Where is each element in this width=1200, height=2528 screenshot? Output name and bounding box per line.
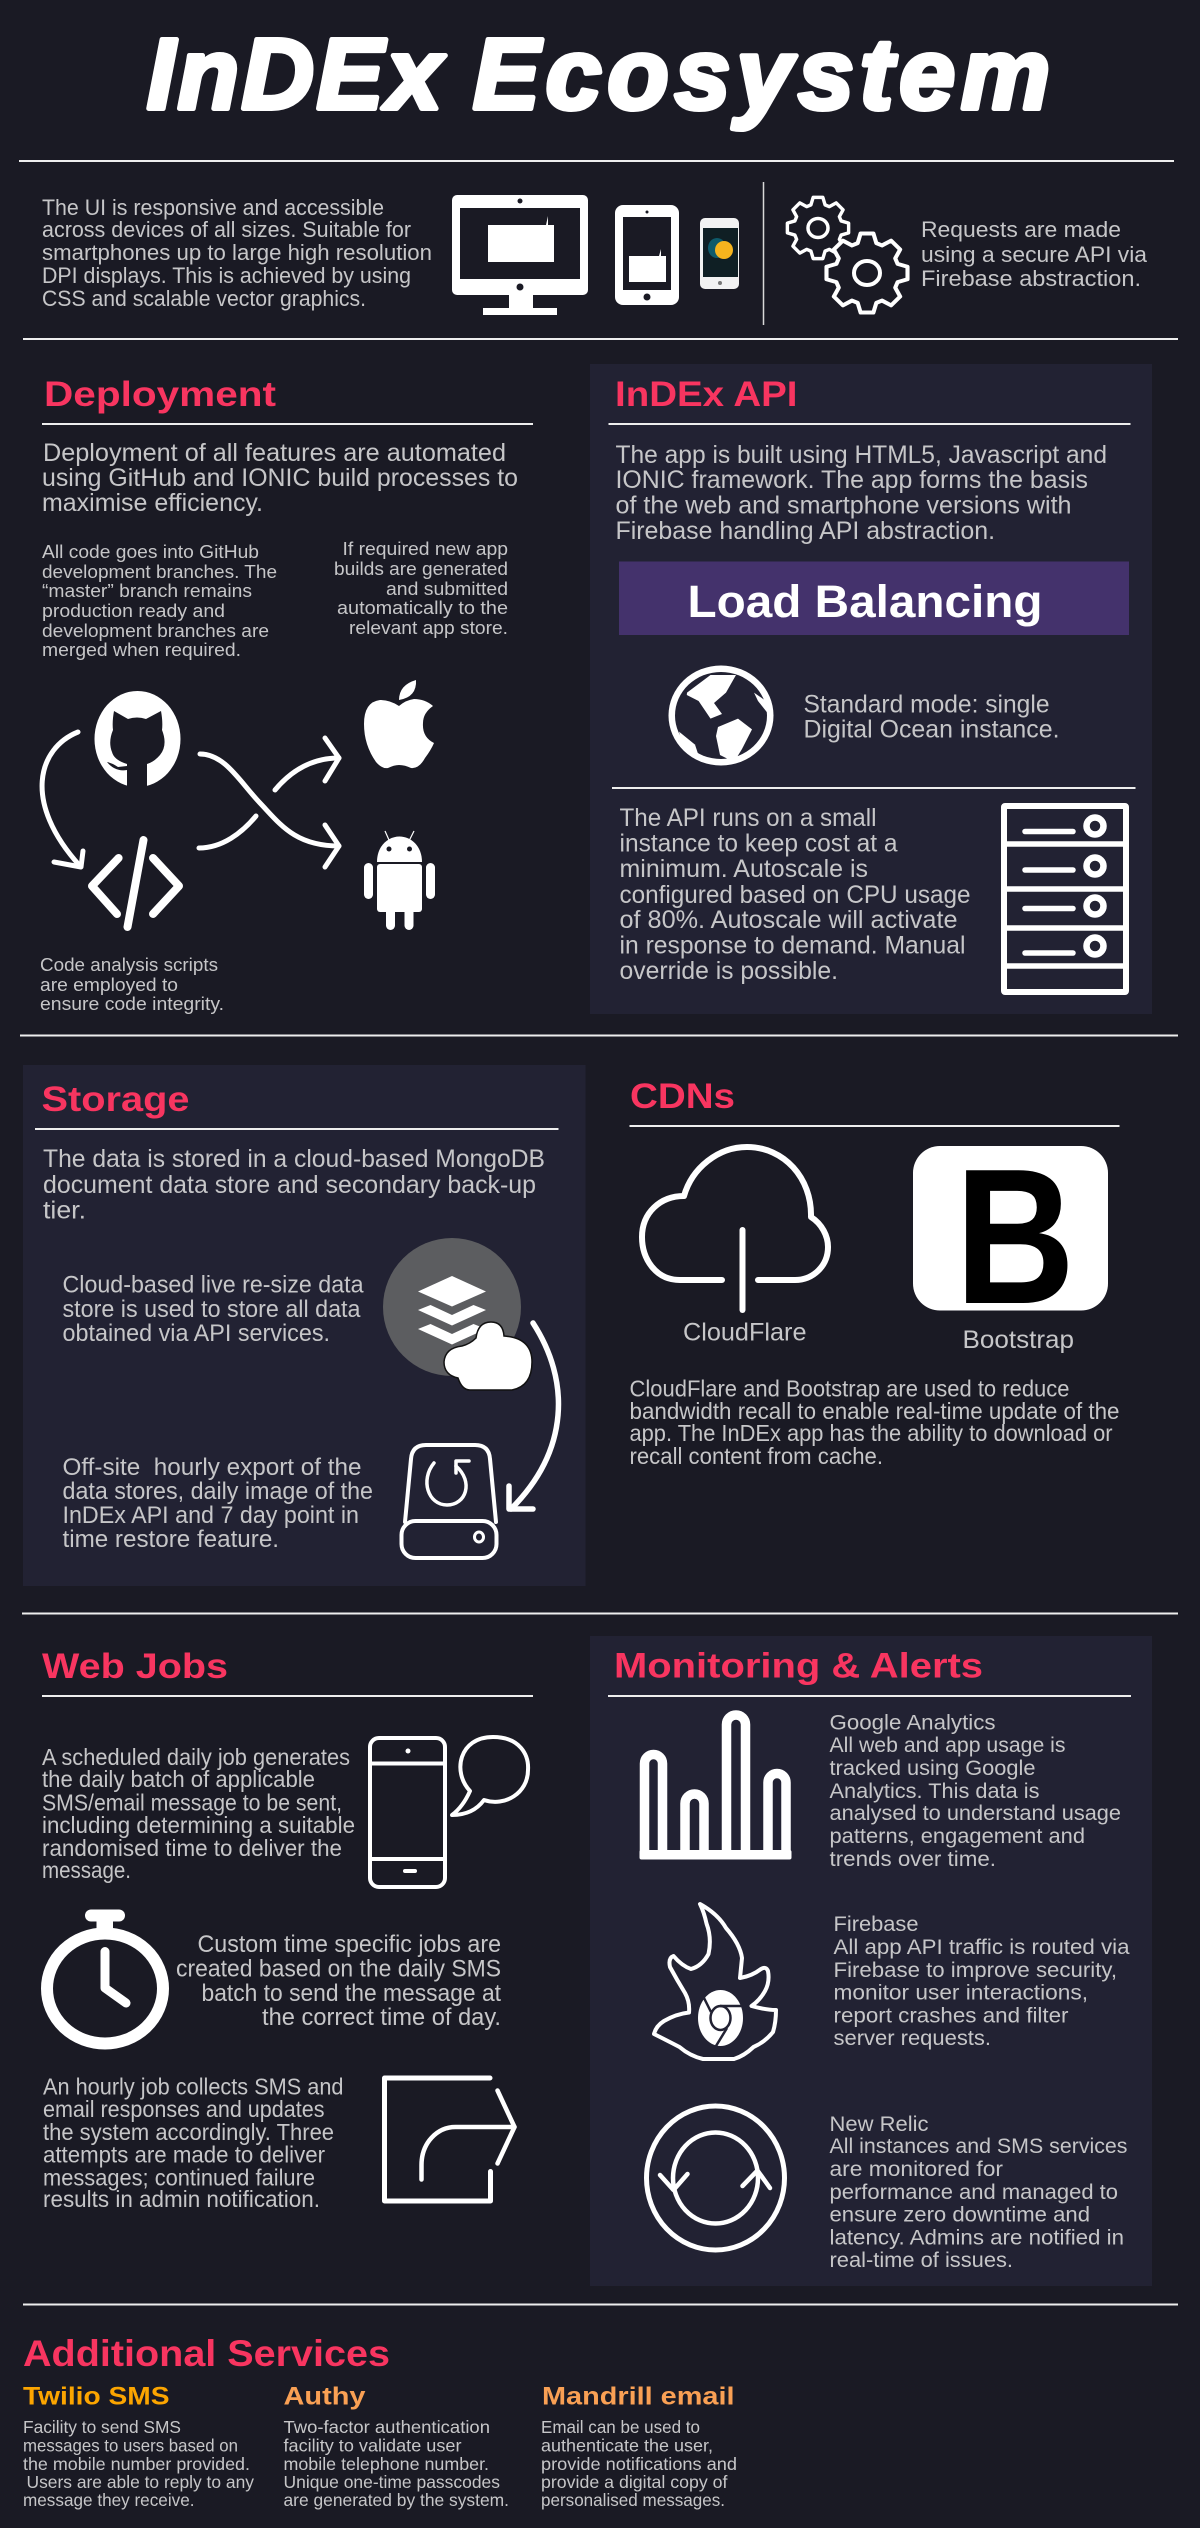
text: scheduled daily job xyxy=(42,1744,355,1883)
text: Firebase: Firebase to improve security, xyxy=(834,1958,1117,1982)
text: autoscale: in response to demand. Manual xyxy=(620,932,966,960)
text: API summary xyxy=(616,441,1107,545)
text: code analysis: are employed to xyxy=(40,975,178,995)
arrow: data store to backup xyxy=(509,1323,558,1509)
text: off-site backup: data stores, daily image of the xyxy=(62,1478,373,1505)
text: Google Analytics: All web and app usage is xyxy=(830,1733,1066,1757)
heading: Monitoring & Alerts: Monitoring & Alerts xyxy=(614,1646,983,1686)
text: custom time jobs: created based on the daily SMS xyxy=(176,1956,501,1982)
text: New Relic: real-time of issues. xyxy=(830,2248,1013,2272)
intro: responsive UI text: CSS and scalable vector graphics. xyxy=(42,286,366,311)
text: New Relic: are monitored for xyxy=(830,2157,1003,2181)
text: Google Analytics: Analytics. This data is xyxy=(830,1779,1040,1803)
text: New Relic xyxy=(830,2112,1128,2272)
text: app store builds xyxy=(334,539,508,638)
text: autoscale: configured based on CPU usage xyxy=(620,881,970,909)
icon: globe xyxy=(668,666,774,766)
title: InDEx xyxy=(147,18,445,130)
arrow: code to Apple xyxy=(199,738,339,848)
text: API summary: IONIC framework. The app forms the basis xyxy=(616,466,1088,494)
intro: responsive UI text: smartphones up to large high resolution xyxy=(42,240,432,265)
column: Authy: facility to validate user xyxy=(284,2436,462,2456)
text: autoscale: instance to keep cost at a xyxy=(620,830,898,858)
text: custom time jobs xyxy=(176,1931,501,2031)
icon: GitHub xyxy=(94,691,180,790)
intro: responsive UI text: The UI is responsive and accessible xyxy=(42,195,384,220)
text: off-site backup: InDEx API and 7 day point in xyxy=(62,1502,359,1529)
text: cloud-based data store: Cloud-based live re-size data xyxy=(62,1272,364,1298)
column: Twilio SMS: Users are able to reply to any xyxy=(26,2472,254,2492)
intro: responsive UI text: across devices of all sizes. Suitable for xyxy=(42,217,411,242)
intro: secure API text: using a secure API via xyxy=(921,242,1148,267)
text: Firebase: All app API traffic is routed via xyxy=(834,1935,1130,1959)
text: GitHub branches: All code goes into GitHub xyxy=(42,542,259,562)
text: Google Analytics: patterns, engagement and xyxy=(830,1824,1085,1848)
icon: New Relic cycle xyxy=(646,2106,784,2250)
text: Google Analytics: trends over time. xyxy=(830,1847,996,1871)
panel: Deployment xyxy=(40,375,533,1014)
text: GitHub branches: development branches. The xyxy=(42,562,277,582)
text: standard mode: Standard mode: single xyxy=(804,690,1050,718)
icon: CloudFlare cloud xyxy=(642,1147,828,1310)
text: custom time jobs: the correct time of day. xyxy=(262,2004,501,2031)
column: Authy: Unique one-time passcodes xyxy=(284,2472,500,2492)
banner: Load Balancing xyxy=(619,562,1129,635)
text: New Relic: latency. Admins are notified in xyxy=(830,2226,1124,2250)
text: deployment summary xyxy=(42,439,518,517)
text: GitHub branches: production ready and xyxy=(42,601,225,621)
column: Twilio SMS: message they receive. xyxy=(23,2490,194,2510)
icon: tablet xyxy=(615,205,679,305)
panel: Storage xyxy=(23,1065,586,1586)
icon: code brackets xyxy=(92,840,179,927)
text: custom time jobs: batch to send the message at xyxy=(202,1980,501,2007)
text: New Relic: New Relic xyxy=(830,2112,929,2136)
column: Mandrill email: Mandrill email xyxy=(542,2382,734,2410)
label: CloudFlare: CloudFlare xyxy=(683,1318,806,1346)
column: Twilio SMS: Facility to send SMS xyxy=(23,2417,181,2437)
text: New Relic: ensure zero downtime and xyxy=(830,2202,1090,2226)
text: scheduled daily job: SMS/email message to be sent, xyxy=(42,1790,342,1816)
title xyxy=(147,18,1050,130)
icon: stopwatch xyxy=(47,1910,163,2044)
column: Authy: Two-factor authentication xyxy=(284,2417,490,2437)
panel: CDNs xyxy=(630,1077,1120,1469)
text: Firebase xyxy=(834,1912,1130,2050)
icon: phone with speech bubble xyxy=(370,1737,528,1887)
text: scheduled daily job: including determining a suitable xyxy=(42,1812,355,1838)
text: deployment summary: maximise efficiency. xyxy=(42,489,263,517)
text: deployment summary: Deployment of all features are automated xyxy=(43,439,506,467)
text: CDN summary: app. The InDEx app has the ability to download or xyxy=(630,1420,1113,1446)
text: autoscale: The API runs on a small xyxy=(620,804,876,832)
panel: Additional Services xyxy=(23,2333,737,2510)
panel: InDEx API xyxy=(590,364,1152,1014)
text: Firebase: server requests. xyxy=(834,2026,991,2050)
panel: Web Jobs xyxy=(42,1647,533,2212)
label: Bootstrap: Bootstrap xyxy=(962,1326,1074,1354)
intro: secure API text xyxy=(921,217,1148,291)
text: off-site backup xyxy=(62,1454,373,1553)
column: Authy: are generated by the system. xyxy=(284,2490,509,2510)
icon: Bootstrap: B xyxy=(955,1128,1075,1344)
text: hourly job: attempts are made to deliver xyxy=(43,2142,325,2168)
text: app store builds: builds are generated xyxy=(334,559,508,579)
text: Firebase: Firebase xyxy=(834,1912,918,1936)
text: CDN summary: bandwidth recall to enable real-time update of the xyxy=(630,1398,1120,1424)
text: GitHub branches: merged when required. xyxy=(42,640,241,660)
arrow: GitHub to Android xyxy=(200,754,339,867)
text: API summary: The app is built using HTML5, Javascript and xyxy=(616,441,1107,469)
icon: share arrow box xyxy=(384,2078,514,2201)
text: scheduled daily job: randomised time to deliver the xyxy=(42,1835,342,1861)
column: Twilio SMS xyxy=(23,2382,254,2510)
column: Mandrill email xyxy=(541,2382,737,2510)
heading: Web Jobs: Web Jobs xyxy=(42,1647,228,1686)
icon: bar chart xyxy=(640,1715,792,1860)
column: Twilio SMS: messages to users based on xyxy=(23,2436,238,2456)
text: New Relic: All instances and SMS services xyxy=(830,2134,1128,2158)
intro: secure API text: Firebase abstraction. xyxy=(921,266,1141,291)
text: deployment summary: using GitHub and IONIC build processes to xyxy=(42,464,518,492)
text: GitHub branches: “master” branch remains xyxy=(42,581,252,601)
text: code analysis xyxy=(40,955,224,1014)
text: Firebase: report crashes and filter xyxy=(834,2004,1068,2028)
text: hourly job xyxy=(43,2074,344,2212)
text: standard mode xyxy=(804,690,1060,744)
icon: smartphone xyxy=(700,218,739,289)
heading: CDNs: CDNs xyxy=(630,1077,735,1116)
column: Mandrill email: provide a digital copy of xyxy=(541,2472,728,2492)
text: storage summary: tier. xyxy=(43,1196,86,1224)
panel: Monitoring & Alerts xyxy=(590,1636,1152,2286)
text: scheduled daily job: A scheduled daily job generates xyxy=(42,1744,350,1770)
text: cloud-based data store xyxy=(62,1272,364,1347)
intro: responsive UI text: DPI displays. This is achieved by using xyxy=(42,263,411,288)
column: Authy: Authy xyxy=(284,2382,366,2410)
icon: Apple xyxy=(364,680,434,768)
text: hourly job: results in admin notification. xyxy=(43,2186,320,2212)
column: Mandrill email: Email can be used to xyxy=(541,2417,700,2437)
text: autoscale: minimum. Autoscale is xyxy=(620,855,868,883)
banner: Load Balancing: Load Balancing xyxy=(688,576,1042,627)
text: code analysis: ensure code integrity. xyxy=(40,994,224,1014)
icon: layers with cloud xyxy=(383,1238,532,1390)
icon: Android xyxy=(364,831,435,930)
column: Authy: mobile telephone number. xyxy=(284,2454,489,2474)
text: app store builds: relevant app store. xyxy=(349,618,508,638)
text: GitHub branches: development branches are xyxy=(42,621,269,641)
text: GitHub branches xyxy=(42,542,277,660)
text: scheduled daily job: the daily batch of applicable xyxy=(42,1766,315,1792)
heading: Additional Services: Additional Services xyxy=(23,2333,390,2374)
column: Twilio SMS: the mobile number provided. xyxy=(23,2454,250,2474)
text: cloud-based data store: obtained via API services. xyxy=(62,1320,330,1347)
arrow: GitHub to code analysis xyxy=(42,732,83,867)
column: Mandrill email: provide notifications and xyxy=(541,2454,737,2474)
text: New Relic: performance and managed to xyxy=(830,2180,1118,2204)
icon: desktop monitor xyxy=(452,195,588,315)
text: storage summary xyxy=(43,1145,545,1224)
icon: Firebase flame xyxy=(654,1904,776,2059)
text: hourly job: messages; continued failure xyxy=(43,2164,315,2190)
icon: gears xyxy=(787,197,908,313)
title: Ecosystem xyxy=(473,18,1050,130)
text: Firebase: monitor user interactions, xyxy=(834,1980,1088,2004)
text: Google Analytics: analysed to understand usage xyxy=(830,1801,1121,1825)
intro: responsive UI text xyxy=(42,195,432,311)
text: CDN summary: CloudFlare and Bootstrap are used to reduce xyxy=(630,1376,1070,1402)
column: Authy xyxy=(284,2382,509,2510)
text: storage summary: The data is stored in a cloud-based MongoDB xyxy=(43,1145,545,1173)
text: storage summary: document data store and secondary back-up xyxy=(43,1171,536,1199)
text: API summary: Firebase handling API abstraction. xyxy=(616,517,995,545)
text: scheduled daily job: message. xyxy=(42,1857,131,1883)
text: app store builds: and submitted xyxy=(386,579,508,599)
text: hourly job: An hourly job collects SMS and xyxy=(43,2074,344,2100)
text: app store builds: automatically to the xyxy=(337,598,508,618)
text: hourly job: email responses and updates xyxy=(43,2096,324,2122)
heading: Storage: Storage xyxy=(42,1080,190,1119)
text: Google Analytics: tracked using Google xyxy=(830,1756,1036,1780)
text: CDN summary: recall content from cache. xyxy=(630,1443,883,1469)
text: Google Analytics: Google Analytics xyxy=(830,1710,996,1734)
text: off-site backup: Off-site hourly export of the xyxy=(62,1454,362,1481)
text: autoscale: of 80%. Autoscale will activate xyxy=(620,906,958,934)
intro: secure API text: Requests are made xyxy=(921,217,1121,242)
text: off-site backup: time restore feature. xyxy=(62,1526,279,1553)
text: autoscale: override is possible. xyxy=(620,957,838,985)
column: Twilio SMS: Twilio SMS xyxy=(23,2382,170,2410)
text: cloud-based data store: store is used to store all data xyxy=(62,1296,361,1323)
text: custom time jobs: Custom time specific jobs are xyxy=(198,1931,501,1958)
text: standard mode: Digital Ocean instance. xyxy=(804,716,1060,744)
icon: backup drive xyxy=(402,1445,496,1558)
heading: InDEx API: InDEx API xyxy=(615,375,798,414)
heading: Deployment: Deployment xyxy=(44,375,276,414)
column: Mandrill email: authenticate the user, xyxy=(541,2436,713,2456)
column: Mandrill email: personalised messages. xyxy=(541,2490,725,2510)
icon: server rack xyxy=(1004,806,1126,992)
text: hourly job: the system accordingly. Three xyxy=(43,2119,334,2145)
text: app store builds: If required new app xyxy=(342,539,508,559)
text: Google Analytics xyxy=(830,1710,1121,1871)
text: code analysis: Code analysis scripts xyxy=(40,955,218,975)
text: API summary: of the web and smartphone versions with xyxy=(616,492,1072,520)
text: CDN summary xyxy=(630,1376,1120,1469)
text: autoscale xyxy=(620,804,970,985)
